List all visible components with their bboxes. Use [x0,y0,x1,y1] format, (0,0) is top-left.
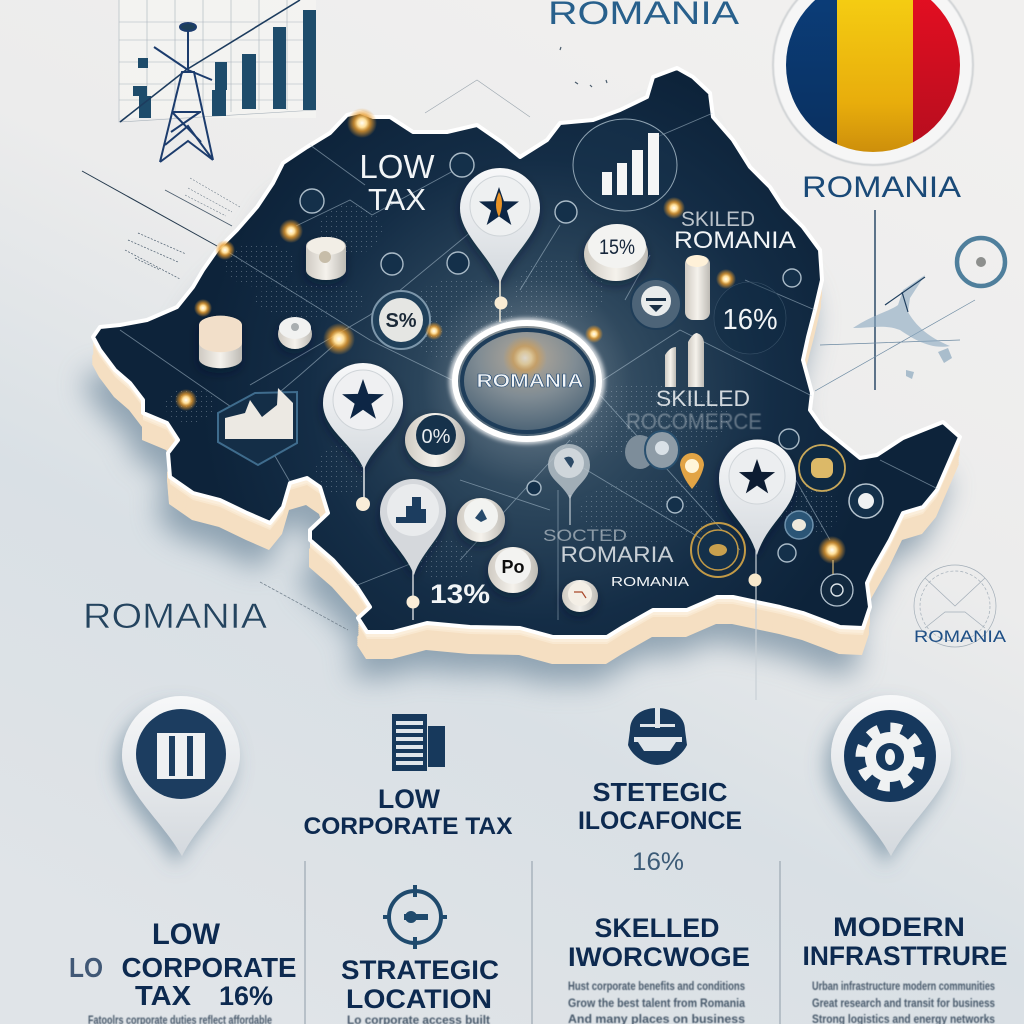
amber lamp [680,453,704,489]
radio tower [154,23,213,162]
trend line [120,0,300,122]
building icon [392,714,445,771]
heading: low corporate tax: CORPORATE TAX [304,813,512,840]
column: low corporate tax: 16% [219,981,273,1011]
white bars [602,133,659,195]
lens sparkle [503,336,547,380]
label: skilled Romania: ROMANIA [674,227,796,254]
gold ring badge east [799,445,845,491]
low tax label: LOW [359,148,435,185]
label: skilled workforce on map: SKILLED [656,386,750,411]
splash shape [853,275,950,347]
icon token south: Po [501,557,525,577]
lens label: ROMANIA [476,371,584,391]
pin north stem [494,280,508,322]
column: low corporate tax: CORPORATE [122,952,296,983]
pin south west stem [406,570,420,620]
13 percent figure: 13% [430,579,490,609]
small pin south west [380,479,446,575]
heading: strategic location garbled: STETEGIC [592,777,728,807]
map shadow [83,114,950,683]
column: skilled workforce: Grow the best talent from Romania [568,998,746,1010]
label: located Romania on map: ROMARIA [560,542,674,567]
column icon [157,733,205,779]
bar chart in circle on map [573,119,677,211]
heart token [457,498,505,542]
central glow [422,275,632,485]
column: modern infrastructure: Great research and transit for business [812,998,995,1010]
chart paper [119,0,316,118]
star pin west [323,363,403,470]
pin west stem [356,465,370,511]
column: low corporate tax: TAX [135,980,191,1011]
twin pillars [665,333,704,387]
pin body [831,695,951,856]
small translucent pin [548,444,590,525]
column: low corporate tax: LOW [152,918,221,951]
round badges east [785,484,883,606]
low tax label [359,148,435,217]
pillar token [685,255,710,320]
15 percent token [584,224,648,281]
lens inner ring [462,330,592,432]
column: modern infrastructure [802,912,1008,1024]
map side extrusion [92,71,960,664]
gear icon [861,728,919,786]
factory hexagon [218,388,297,465]
column: skilled workforce: Hust corporate benefits and conditions [568,981,745,993]
heading: strategic location garbled: ILOCAFONCE [578,807,742,835]
16 percent figure: 16% [722,304,778,336]
target icon [383,885,447,949]
dial sketch and small Romania label [914,565,1007,647]
hexagon [218,392,297,465]
romanian flag [786,0,960,152]
twin grey tokens [625,431,679,469]
15 percent token: 15% [599,236,635,259]
symbol badge [372,291,430,349]
droplets [906,348,952,379]
symbol badge: S% [385,310,417,332]
heading: low corporate tax: LOW [378,784,441,814]
pin: low corporate tax [122,696,240,856]
column: skilled workforce: SKELLED [594,913,720,943]
star pin east [719,440,796,555]
label: skilled Romania [674,208,796,254]
column: modern infrastructure: INFRASTTRURE [802,941,1008,971]
factory [225,388,293,439]
map of Romania [83,68,960,683]
compass vertical line [874,210,876,390]
cylinder token left of centre [306,237,346,280]
glowing nodes [175,108,846,564]
gold ring badge south [691,523,745,577]
label: located Romania on map: SOCTED [543,526,627,545]
heading: low corporate tax [304,784,512,840]
ink strokes [885,277,925,312]
column: strategic location [341,955,499,1024]
column: modern infrastructure: MODERN [833,912,965,942]
label: located Romania on map: ROMANIA [611,574,689,589]
clock token [562,580,598,612]
ring icon right [957,238,1005,286]
chart grid [119,0,316,122]
zero percent token [405,413,465,467]
top-left chart with radio tower [119,0,316,162]
heading: strategic location garbled [578,777,742,835]
16 percent figure [714,282,786,354]
sketch lines upper left [82,47,607,279]
column: low corporate tax: LO [69,952,103,983]
label: Romania lower left: ROMANIA [83,597,268,636]
pin inner disc [136,709,226,799]
label: skilled workforce on map [626,386,762,434]
label: located Romania on map [543,526,689,589]
icon token south [488,547,538,593]
small Romania label: ROMANIA [914,627,1007,646]
label: skilled workforce on map: ROCOMERCE [626,409,762,434]
figure 16 percent: 16% [632,848,684,876]
column: strategic location: STRATEGIC [341,955,499,985]
column: skilled workforce: IWORCWOGE [568,942,750,972]
pin body [122,696,240,856]
pin inner disc [844,710,936,802]
label: skilled Romania: SKILED [681,208,755,231]
column dividers [305,861,780,1024]
layered badge [631,279,681,329]
flag badge [773,0,973,165]
pin east stem [748,550,762,700]
star pin north [460,168,540,283]
chart circle [573,119,677,211]
low tax label: TAX [368,182,426,217]
flag ring [773,0,973,165]
label: Romania under flag: ROMANIA [802,171,961,204]
pin: infrastructure gear [831,695,951,856]
dotted texture patches [165,205,840,580]
zero percent token: 0% [422,426,451,448]
white disc token [278,317,312,349]
map network lines and texture [120,110,940,620]
lens ring [455,323,599,439]
chart bars [133,10,316,118]
lens halo [449,318,605,444]
dial sketch [914,565,996,647]
column: low corporate tax [69,918,296,1024]
central Romania lens [449,318,605,444]
column: strategic location: LOCATION [346,984,492,1014]
map top face [93,68,960,637]
helmet icon [628,708,687,765]
hatch line lower left [260,582,348,630]
column: skilled workforce [568,913,750,1024]
tall cream cylinder [199,316,242,368]
diagonal sketch lines [815,300,975,391]
small ring icons [300,153,801,562]
compass and splash sketch [815,210,975,391]
